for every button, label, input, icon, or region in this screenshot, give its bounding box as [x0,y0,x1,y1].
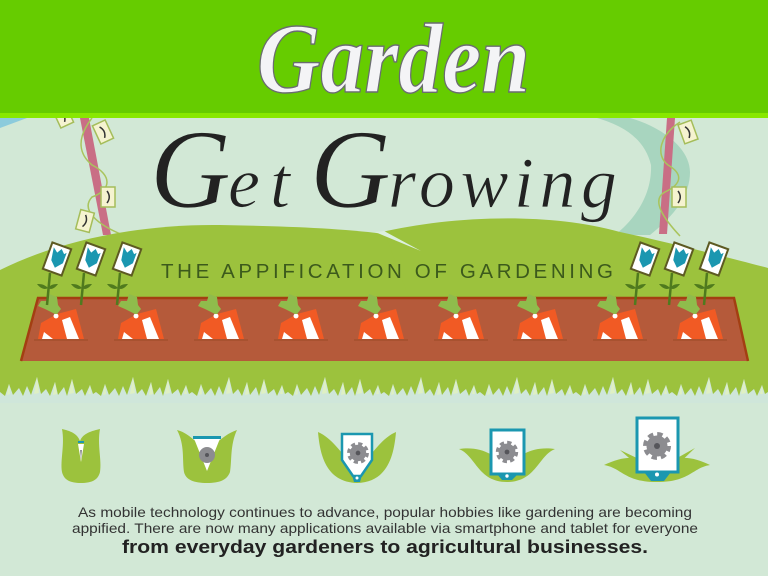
app flowers left [37,242,141,305]
growth stage 5 [604,418,710,482]
growth stage 3 [318,432,396,483]
growth stage 2 [177,430,237,483]
main title: G [150,108,231,232]
hills [0,218,768,380]
growth stage 1 [62,429,100,483]
swoosh [597,118,690,235]
header band [0,0,768,118]
garden bed [21,298,748,361]
description text: As mobile technology continues to advance, popular hobbies like gardening are becoming [78,504,692,520]
main title: et [228,143,300,223]
app flowers right [625,242,728,305]
main title: rowing [388,143,622,223]
description text: from everyday gardeners to agricultural businesses. [122,537,648,557]
left vine pole [52,104,123,235]
right vine pole [659,118,698,236]
description text [72,504,698,557]
carrots [34,294,727,340]
description text: appified. There are now many applications available via smartphone and tablet for everyone [72,520,698,536]
grass edge [0,372,768,405]
subtitle: THE APPIFICATION OF GARDENING [161,260,613,283]
sky corner [0,118,27,128]
growth stage 4 [459,430,555,482]
header title: Garden [257,3,530,114]
main title: G [310,108,391,232]
